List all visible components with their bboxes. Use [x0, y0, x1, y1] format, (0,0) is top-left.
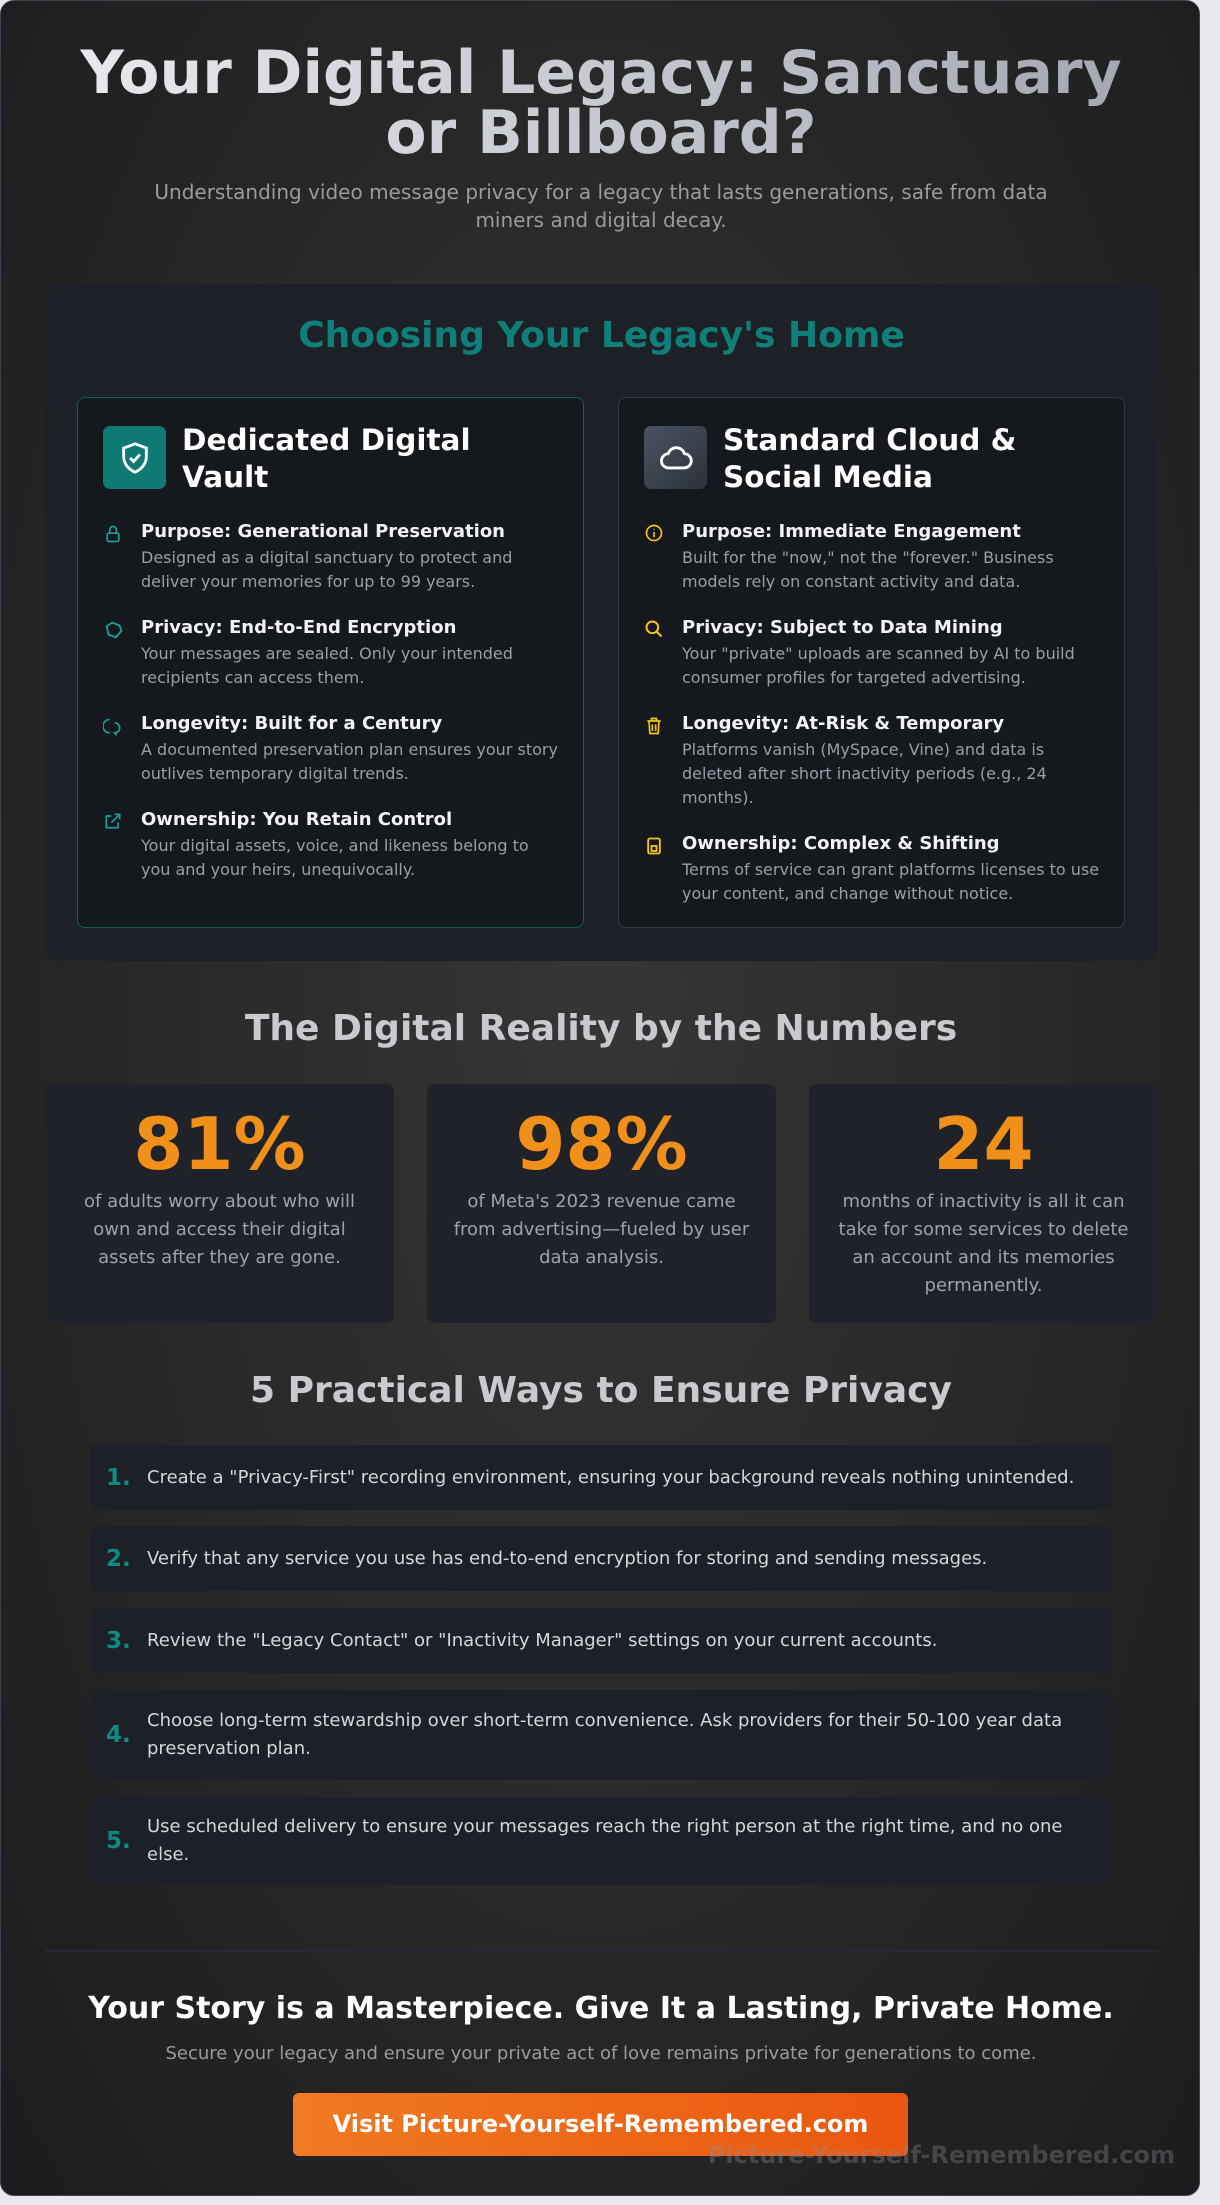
item: privacy: Privacy: Subject to Data Mining: [682, 617, 1003, 638]
card title: Dedicated Digital: [182, 423, 471, 457]
heading: 5 practical ways: 5 Practical Ways to Ensure Privacy: [250, 1370, 952, 1411]
card title: Standard Cloud &: [723, 423, 1016, 457]
stat: 81%: [45, 1084, 394, 1323]
list item 4: Choose long-term stewardship over short-term convenience. Ask providers for their 50-100 year data preservation plan.: [147, 1710, 1062, 1759]
item: purpose: Purpose: Immediate Engagement: [682, 521, 1021, 542]
icon: cloud: [644, 426, 707, 489]
title: or Billboard?: [385, 98, 817, 168]
list item 2: Verify that any service you use has end-to-end encryption for storing and sending messages.: [147, 1548, 987, 1568]
list item 2: [90, 1526, 1112, 1591]
card title: Social Media: [723, 460, 933, 494]
list item 4: 4.: [106, 1722, 131, 1748]
list item 3: [90, 1608, 1112, 1673]
CTA button: Visit Picture-Yourself-Remembered.com: [333, 2110, 868, 2138]
stat: 24: 24: [933, 1102, 1034, 1186]
stat: 98%: [427, 1084, 776, 1323]
watermark: Picture-Yourself-Remembered.com: [708, 2141, 1175, 2169]
list item 1: Create a "Privacy-First" recording environment, ensuring your background reveals nothing unintended.: [147, 1466, 1074, 1488]
list item 1: [90, 1445, 1112, 1510]
item: privacy: [646, 617, 1075, 687]
item: purpose: [646, 521, 1054, 591]
title: [1, 43, 1201, 163]
stat: 24: [809, 1084, 1158, 1323]
item: privacy: Your messages are sealed. Only your intended recipients can access them.: [141, 644, 513, 687]
subtitle: Understanding video message privacy for a legacy that lasts generations, safe from data miners and digital decay.: [154, 180, 1048, 232]
stat: 81%: of adults worry about who will own and access their digital assets after they are gone.: [84, 1191, 355, 1268]
item: longevity: [103, 713, 558, 783]
stat: 98%: 98%: [515, 1102, 688, 1186]
CTA subtext: Secure your legacy and ensure your private act of love remains private for generations to come.: [165, 2043, 1037, 2064]
panel: choosing your legacy's home: [45, 284, 1158, 961]
item: ownership: [647, 833, 1099, 903]
CTA button: [293, 2093, 908, 2156]
item: purpose: Built for the "now," not the "forever." Business models rely on constant activity and data.: [682, 548, 1054, 591]
item: longevity: A documented preservation plan ensures your story outlives temporary digital trends.: [141, 740, 558, 783]
heading: digital reality: The Digital Reality by the Numbers: [245, 1008, 957, 1049]
card title: [182, 423, 471, 494]
list item 4: [90, 1690, 1112, 1780]
item: purpose: [106, 521, 512, 591]
item: longevity: Longevity: At-Risk & Temporary: [682, 713, 1004, 734]
item: ownership: Your digital assets, voice, and likeness belong to you and your heirs, unequivocally.: [141, 836, 529, 879]
item: ownership: Ownership: Complex & Shifting: [682, 833, 1000, 854]
item: longevity: [647, 713, 1047, 807]
CTA heading: Your Story is a Masterpiece. Give It a Lasting, Private Home.: [88, 1991, 1114, 2026]
list item 1: 1.: [106, 1464, 131, 1490]
title: Your Digital Legacy: Sanctuary: [80, 38, 1122, 108]
item: longevity: Longevity: Built for a Century: [141, 713, 442, 734]
list item 3: 3.: [106, 1628, 131, 1654]
item: purpose: Purpose: Generational Preservation: [141, 521, 505, 542]
list item 5: Use scheduled delivery to ensure your messages reach the right person at the right time, and no one else.: [147, 1816, 1062, 1865]
list item 5: [90, 1797, 1112, 1885]
stat: 24: months of inactivity is all it can take for some services to delete an account and its memories permanently.: [839, 1191, 1128, 1296]
stat: 81%: 81%: [133, 1102, 306, 1186]
item: privacy: Privacy: End-to-End Encryption: [141, 617, 456, 638]
list item 3: Review the "Legacy Contact" or "Inactivity Manager" settings on your current accounts.: [147, 1630, 937, 1650]
item: ownership: [106, 809, 529, 879]
item: privacy: Your "private" uploads are scanned by AI to build consumer profiles for targeted advertising.: [682, 644, 1075, 687]
card: standard cloud & social media: [618, 397, 1125, 928]
card title: Vault: [182, 460, 268, 494]
item: privacy: [106, 617, 513, 687]
list item 5: 5.: [106, 1828, 131, 1854]
icon: shield: [103, 426, 166, 489]
list item 2: 2.: [106, 1546, 131, 1572]
item: ownership: Ownership: You Retain Control: [141, 809, 452, 830]
card title: [723, 423, 1016, 494]
item: ownership: Terms of service can grant platforms licenses to use your content, and change without notice.: [682, 860, 1099, 903]
card: dedicated digital vault: [77, 397, 584, 928]
panel heading: Choosing Your Legacy's Home: [298, 315, 905, 356]
stat: 98%: of Meta's 2023 revenue came from advertising—fueled by user data analysis.: [454, 1191, 749, 1268]
item: purpose: Designed as a digital sanctuary to protect and deliver your memories for up to 99 years.: [141, 548, 512, 591]
item: longevity: Platforms vanish (MySpace, Vine) and data is deleted after short inactivity periods (e.g., 24 months).: [682, 740, 1047, 807]
